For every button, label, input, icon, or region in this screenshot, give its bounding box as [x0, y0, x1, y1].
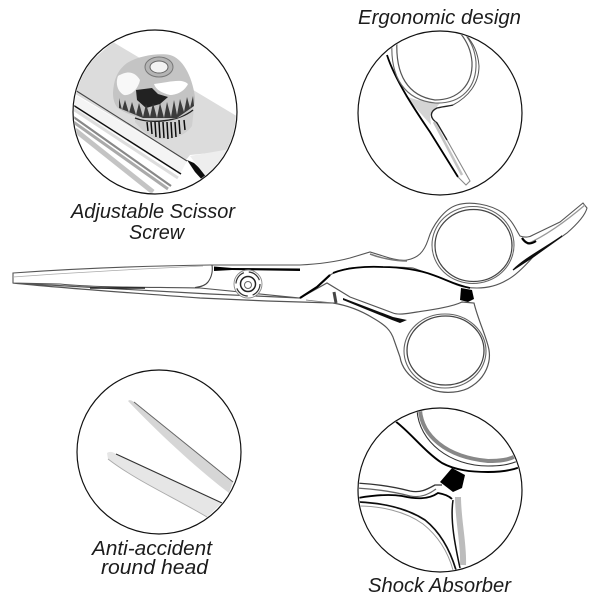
lower finger hole: [404, 314, 486, 388]
shock absorber bumper: [460, 288, 474, 302]
blade edge details: [333, 267, 470, 288]
upper blade tip: [128, 400, 233, 493]
vertical shank: [458, 497, 463, 565]
label: anti-accident round head: [91, 538, 213, 579]
upper ring arcs: [420, 410, 516, 461]
panel: anti-accident round head detail: [77, 370, 241, 534]
screw head dome: [113, 54, 195, 120]
lower rails: [70, 90, 236, 192]
label: shock absorber: Shock Absorber: [368, 575, 512, 597]
lower blade tip: [107, 452, 222, 517]
panel: shock absorber detail: [356, 408, 522, 572]
upper blade and finger handle: [13, 203, 587, 298]
panel: ergonomic design detail: [358, 30, 522, 195]
upper finger hole: [432, 206, 514, 284]
pivot screw: [234, 270, 262, 298]
lower handle band: [356, 483, 442, 492]
scissor plate: [72, 42, 240, 160]
label: adjustable scissor screw: Adjustable Scissor: [70, 201, 236, 223]
label: anti-accident round head: round head: [101, 557, 209, 579]
finger hole arc: [397, 34, 472, 100]
bumper: [440, 468, 465, 492]
label: ergonomic design: Ergonomic design: [358, 7, 521, 29]
panel: adjustable scissor screw detail: [70, 30, 240, 194]
knurled screw shaft: [135, 108, 194, 139]
finger rest: [387, 30, 478, 185]
lower blade and finger handle: [13, 283, 489, 392]
label: anti-accident round head: Anti-accident: [91, 538, 213, 560]
label: adjustable scissor screw: Screw: [129, 222, 186, 244]
label: adjustable scissor screw: [70, 201, 236, 244]
main scissors illustration: [13, 203, 587, 392]
